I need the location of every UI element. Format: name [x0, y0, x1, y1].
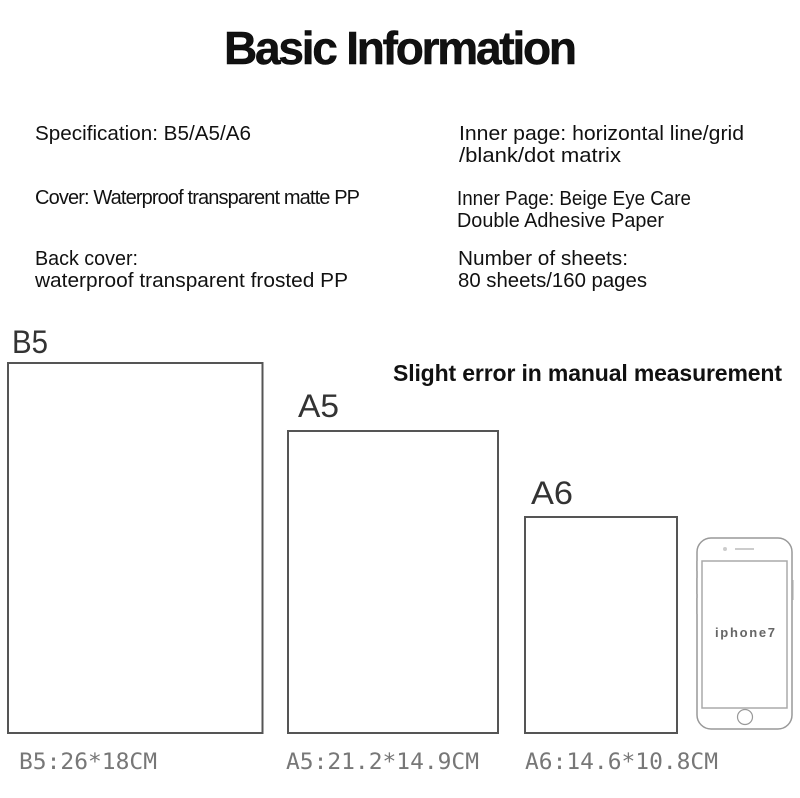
- panel: B5 size: B5: [12, 324, 48, 360]
- panel: A5 size: A5: [298, 388, 339, 424]
- panel: A6 size: [525, 475, 718, 775]
- panel: A6 size: A6:14.6*10.8CM: [525, 750, 718, 775]
- text block: number of sheets: 80 sheets/160 pages: [458, 270, 647, 292]
- text block: inner page type: [459, 123, 744, 167]
- panel: B5 size: B5:26*18CM: [19, 750, 157, 775]
- text block: inner page paper: Double Adhesive Paper: [457, 210, 664, 232]
- panel: A5 size: A5:21.2*14.9CM: [286, 750, 479, 775]
- panel: A5 size: [286, 388, 498, 775]
- text block: back cover: [34, 248, 348, 292]
- text block: inner page paper: [457, 188, 691, 232]
- callout: measurement note: Slight error in manual measurement: [393, 360, 782, 386]
- icon: iphone7 outline: iphone7: [715, 625, 775, 640]
- text block: inner page type: /blank/dot matrix: [459, 145, 621, 167]
- panel: B5 size: [8, 324, 262, 775]
- panel: A6 size: A6: [531, 475, 573, 511]
- text block: number of sheets: [458, 248, 647, 292]
- title: Basic Information: [224, 22, 577, 74]
- text block: back cover: waterproof transparent frosted PP: [34, 270, 348, 292]
- text block: inner page type: Inner page: horizontal line/grid: [459, 123, 744, 145]
- text block: number of sheets: Number of sheets:: [458, 248, 628, 270]
- text block: specification: Specification: B5/A5/A6: [35, 123, 251, 145]
- icon: iphone7 outline: [696, 538, 794, 729]
- text block: cover: Cover: Waterproof transparent matte PP: [35, 187, 360, 209]
- text block: inner page paper: Inner Page: Beige Eye Care: [457, 188, 691, 210]
- text block: back cover: Back cover:: [35, 248, 138, 270]
